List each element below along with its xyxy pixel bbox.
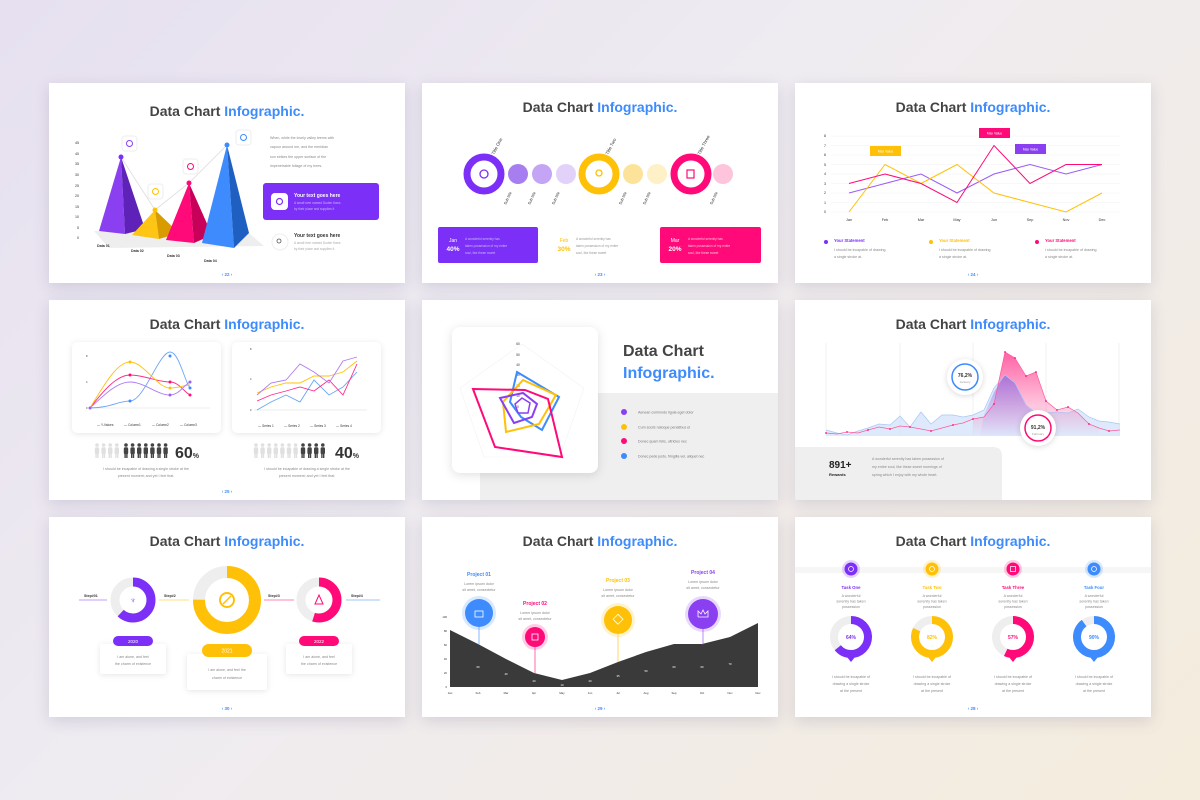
box: Feb: soul, like these sweet bbox=[576, 251, 606, 255]
area chart: Oct bbox=[700, 691, 704, 695]
card 2021: I am alone, and feel the bbox=[208, 668, 246, 672]
line chart: May bbox=[953, 218, 961, 222]
box: Mar: Mar bbox=[671, 238, 680, 244]
paragraph: vapour around me, and the meridian bbox=[270, 145, 328, 149]
project 01: sit amet, consectetur bbox=[462, 588, 496, 592]
rewards box: A wonderful serenity has taken possession of bbox=[872, 457, 944, 461]
rewards box: Rewards bbox=[829, 472, 846, 477]
project 02 bbox=[518, 601, 552, 674]
people 60%: 60% bbox=[175, 445, 200, 462]
task two: 82% bbox=[927, 635, 938, 641]
project 01: Lorem ipsum dolor bbox=[464, 582, 495, 586]
pyramid chart: Data 04 bbox=[204, 259, 217, 263]
circle row: Sub title bbox=[527, 191, 537, 205]
badge: 76,2%: January bbox=[960, 380, 971, 384]
radar card: 0 bbox=[517, 405, 519, 409]
area chart: Mar bbox=[504, 691, 508, 695]
callout: purple bbox=[263, 183, 379, 220]
slide 9: task donuts bbox=[795, 517, 1151, 717]
chart card left bbox=[72, 342, 221, 433]
box: Jan bbox=[438, 227, 538, 263]
title: Data Chart Infographic. bbox=[523, 99, 677, 115]
task two: Task Two bbox=[923, 585, 942, 590]
task two: at the present bbox=[921, 689, 943, 693]
area chart: 50 bbox=[644, 669, 648, 673]
legend bbox=[824, 238, 1097, 259]
paragraph: impenetrable foliage of my trees. bbox=[270, 164, 322, 168]
legend: I should be incapable of drawing bbox=[834, 248, 886, 252]
chart card right bbox=[232, 342, 381, 433]
box: Mar: soul, like these sweet bbox=[688, 251, 718, 255]
project 02: sit amet, consectetur bbox=[518, 617, 552, 621]
slide 8: dark area chart with projects: ‹ 29 › bbox=[595, 706, 606, 711]
circle row: Sub title bbox=[503, 191, 513, 205]
badge: 76,2% bbox=[947, 359, 983, 395]
pyramid chart: Data 01 bbox=[97, 244, 110, 248]
area chart: 60 bbox=[672, 665, 676, 669]
pyramid chart: Data 03 bbox=[167, 254, 180, 258]
title: Data Chart Infographic. bbox=[523, 533, 677, 549]
callout: second bbox=[272, 233, 341, 251]
box: Mar: A wonderful serenity has bbox=[688, 237, 723, 241]
chart card left: — Column1 bbox=[124, 423, 141, 427]
task three: serenity has taken bbox=[998, 600, 1028, 604]
area chart: Aug bbox=[644, 691, 649, 695]
project 04: sit amet, consectetur bbox=[686, 586, 720, 590]
box: Feb: A wonderful serenity has bbox=[576, 237, 611, 241]
slide 6: area chart with badges bbox=[795, 300, 1151, 500]
area chart: Jul bbox=[616, 691, 620, 695]
slide 7: step donuts bbox=[49, 517, 405, 717]
task four: drawing a single stroke bbox=[1076, 682, 1112, 686]
title: Data Chart Infographic. bbox=[150, 103, 304, 119]
task three: Task Three bbox=[1002, 585, 1025, 590]
chart card left: — Column3 bbox=[180, 423, 197, 427]
line chart: Max Value bbox=[1023, 148, 1038, 152]
slide 8: dark area chart with projects bbox=[422, 517, 778, 717]
circle row bbox=[467, 134, 733, 205]
circle row: Sub title bbox=[551, 191, 561, 205]
task three: A wonderful bbox=[1004, 594, 1023, 598]
task one: A wonderful bbox=[842, 594, 861, 598]
area chart: 70 bbox=[728, 662, 732, 666]
slide 3: line chart bbox=[795, 83, 1151, 283]
legend: I should be incapable of drawing bbox=[1045, 248, 1097, 252]
legend list: Cum sociis natoque penatibus et bbox=[638, 426, 690, 430]
line chart: 1 bbox=[824, 201, 826, 205]
area chart: Nov bbox=[728, 691, 733, 695]
project 03: sit amet, consectetur bbox=[601, 594, 635, 598]
box: Jan: soul, like these sweet bbox=[465, 251, 495, 255]
circle row: Sub title bbox=[709, 191, 719, 205]
task three: drawing a single stroke bbox=[995, 682, 1031, 686]
chart card right: — Series 4 bbox=[336, 424, 352, 428]
slide 4: two line charts with people: ‹ 25 › bbox=[222, 489, 233, 494]
project 04: Project 04 bbox=[691, 570, 715, 576]
title: Data Chart Infographic. bbox=[896, 533, 1050, 549]
task four: I should be incapable of bbox=[1075, 675, 1113, 679]
callout: purple: Your text goes here bbox=[294, 193, 341, 199]
paragraph: When, while the lovely valley teems with bbox=[270, 136, 334, 140]
line chart: 8 bbox=[824, 134, 826, 138]
rewards box bbox=[795, 447, 1002, 500]
area chart: Jan bbox=[448, 691, 453, 695]
radar card: 50 bbox=[516, 353, 520, 357]
project 04: Lorem ipsum dolor bbox=[688, 580, 719, 584]
callout: purple: A small river named Duden flows bbox=[294, 201, 341, 205]
chart card right: 4 bbox=[250, 377, 252, 381]
task four: at the present bbox=[1083, 689, 1105, 693]
donut 2021 bbox=[199, 572, 255, 628]
people 40% bbox=[254, 443, 360, 478]
box: Feb: Feb bbox=[560, 238, 569, 244]
area chart: 20 bbox=[532, 679, 536, 683]
task two bbox=[913, 560, 951, 693]
line chart: 3 bbox=[824, 182, 826, 186]
area chart: 10 bbox=[560, 683, 564, 687]
area chart: May bbox=[559, 691, 565, 695]
callout: purple: by their place and supplies it bbox=[294, 207, 334, 211]
callout: second: by their place and supplies it bbox=[294, 247, 334, 251]
chart card left: — Y-Values bbox=[97, 423, 114, 427]
pyramid chart: Data 02 bbox=[131, 249, 144, 253]
task one: at the present bbox=[840, 689, 862, 693]
step arrows: Step#2 bbox=[164, 594, 176, 598]
rewards box: spring which I enjoy with my whole heart. bbox=[872, 473, 937, 477]
paragraph: sun strikes the upper surface of the bbox=[270, 155, 326, 159]
pyramid chart: 10 bbox=[75, 215, 79, 219]
rewards box: my entire soul, like these sweet mornings of bbox=[872, 465, 942, 469]
step arrows: Step#3 bbox=[268, 594, 280, 598]
legend: a single stroke at. bbox=[1045, 255, 1073, 259]
area chart: Jun bbox=[588, 691, 593, 695]
line chart: Sep bbox=[1027, 218, 1033, 222]
rewards box: 891+ bbox=[829, 460, 852, 471]
legend: Your Statement bbox=[834, 238, 865, 243]
task one bbox=[832, 560, 870, 693]
people 40%: 40% bbox=[335, 445, 360, 462]
area chart: 60 bbox=[444, 643, 447, 647]
chart card left: — Column2 bbox=[152, 423, 169, 427]
title: Data Chart Infographic. bbox=[896, 99, 1050, 115]
chart card left: 0 bbox=[86, 406, 88, 410]
chart card right: 8 bbox=[250, 347, 252, 351]
slide 3: line chart: ‹ 24 › bbox=[968, 272, 979, 277]
task three bbox=[994, 560, 1032, 693]
legend: a single stroke at. bbox=[834, 255, 862, 259]
card 2020: 2020 bbox=[128, 639, 139, 644]
pyramid chart: 20 bbox=[75, 194, 79, 198]
circle row: Sub title bbox=[618, 191, 628, 205]
pyramid chart: 40 bbox=[75, 152, 79, 156]
callout: second: Your text goes here bbox=[294, 233, 341, 239]
slide 2: circle timeline: ‹ 23 › bbox=[595, 272, 606, 277]
area chart: 60 bbox=[700, 665, 704, 669]
legend: a single stroke at. bbox=[939, 255, 967, 259]
card 2022: the charm of existence bbox=[301, 662, 337, 666]
pyramid chart bbox=[75, 130, 264, 263]
area chart: 35 bbox=[616, 674, 620, 678]
legend list: Donec pede justo, fringilla vel, aliquet nec bbox=[638, 454, 705, 458]
area chart: Feb bbox=[476, 691, 481, 695]
line chart bbox=[824, 128, 1120, 222]
task four: 90% bbox=[1089, 635, 1100, 641]
line chart: 4 bbox=[824, 172, 826, 176]
chart card right: — Series 3 bbox=[310, 424, 326, 428]
area chart: Dec bbox=[756, 691, 761, 695]
title: Data Chart Infographic. bbox=[150, 316, 304, 332]
area chart: 100 bbox=[442, 615, 447, 619]
slide 7: step donuts: ‹ 30 › bbox=[222, 706, 233, 711]
legend: Your Statement bbox=[1045, 238, 1076, 243]
task four: possession bbox=[1085, 605, 1103, 609]
card 2021: 2021 bbox=[221, 648, 233, 654]
area chart: Apr bbox=[532, 691, 536, 695]
box: Jan: Jan bbox=[449, 238, 457, 244]
task two: possession bbox=[923, 605, 941, 609]
line chart: 0 bbox=[824, 210, 826, 214]
task one: I should be incapable of bbox=[832, 675, 870, 679]
slide 1: 3D pyramid chart: ‹ 22 › bbox=[222, 272, 233, 277]
area chart: 20 bbox=[444, 671, 447, 675]
card 2022: I am alone, and feel bbox=[303, 655, 335, 659]
task four bbox=[1075, 560, 1113, 693]
circle row: Title One bbox=[490, 137, 504, 155]
project 02: Project 02 bbox=[523, 601, 547, 607]
people 60%: present moment; and yet I feel that. bbox=[118, 474, 174, 478]
task four: A wonderful bbox=[1085, 594, 1104, 598]
people 60% bbox=[95, 443, 200, 478]
task two: serenity has taken bbox=[917, 600, 947, 604]
circle row: Title Three bbox=[696, 134, 711, 155]
pyramid chart: 5 bbox=[77, 226, 79, 230]
box: Jan: taken possession of my entire bbox=[465, 244, 507, 248]
chart card right: — Series 2 bbox=[284, 424, 300, 428]
donut 2020 bbox=[115, 582, 151, 618]
box: Mar: taken possession of my entire bbox=[688, 244, 730, 248]
legend list bbox=[621, 409, 705, 459]
project 02: Lorem ipsum dolor bbox=[520, 611, 551, 615]
task four: Task Four bbox=[1084, 585, 1104, 590]
badge: 91,2% bbox=[1020, 410, 1056, 446]
line chart: 2 bbox=[824, 191, 826, 195]
card 2021 bbox=[187, 644, 267, 690]
people 60%: I should be incapable of drawing a single stroke at the bbox=[103, 467, 189, 471]
project 01 bbox=[462, 572, 496, 645]
title: Infographic. bbox=[623, 365, 715, 382]
line chart: 7 bbox=[824, 144, 826, 148]
step arrows: Step#01 bbox=[84, 594, 98, 598]
area chart bbox=[442, 615, 761, 695]
project 03 bbox=[601, 578, 635, 662]
card 2021: charm of existence bbox=[212, 676, 242, 680]
chart card right: 0 bbox=[250, 408, 252, 412]
title: Data Chart Infographic. bbox=[896, 316, 1050, 332]
legend: Your Statement bbox=[939, 238, 970, 243]
slide 2: circle timeline bbox=[422, 83, 778, 283]
area chart: Sep bbox=[672, 691, 677, 695]
radar card: 40 bbox=[516, 363, 520, 367]
box: Mar: 20% bbox=[668, 246, 682, 253]
task four: serenity has taken bbox=[1079, 600, 1109, 604]
task two: I should be incapable of bbox=[913, 675, 951, 679]
title bbox=[623, 343, 715, 382]
radar card bbox=[452, 327, 598, 473]
legend list: Donec quam felis, ultricies nec bbox=[638, 440, 687, 444]
task two: A wonderful bbox=[923, 594, 942, 598]
task three: I should be incapable of bbox=[994, 675, 1032, 679]
card 2020: I am alone, and feel bbox=[117, 655, 149, 659]
title: Data Chart bbox=[623, 343, 705, 360]
line chart: Mar bbox=[918, 218, 925, 222]
paragraph bbox=[270, 136, 334, 168]
people 40%: I should be incapable of drawing a single stroke at the bbox=[264, 467, 350, 471]
task one: possession bbox=[842, 605, 860, 609]
task one: serenity has taken bbox=[836, 600, 866, 604]
badge: 76,2%: 76,2% bbox=[958, 373, 973, 379]
project 01: Project 01 bbox=[467, 572, 491, 578]
legend list: Aenean commodo ligula eget dolor bbox=[638, 410, 694, 414]
pyramid chart: 45 bbox=[75, 141, 79, 145]
pyramid chart: 25 bbox=[75, 184, 79, 188]
box: Jan: A wonderful serenity has bbox=[465, 237, 500, 241]
task three: at the present bbox=[1002, 689, 1024, 693]
line chart: Max Value bbox=[987, 132, 1002, 136]
slide 9: task donuts: ‹ 28 › bbox=[968, 706, 979, 711]
project 04 bbox=[685, 570, 721, 645]
task two: drawing a single stroke bbox=[914, 682, 950, 686]
badge: 91,2%: 91,2% bbox=[1031, 425, 1046, 431]
pyramid chart: 30 bbox=[75, 173, 79, 177]
radar card: 20 bbox=[516, 384, 520, 388]
badge: 91,2%: February bbox=[1032, 432, 1044, 436]
chart card left: 8 bbox=[86, 354, 88, 358]
card 2022 bbox=[286, 636, 352, 674]
area chart: 80 bbox=[444, 629, 447, 633]
radar card: 30 bbox=[516, 373, 520, 377]
area chart: 20 bbox=[588, 679, 592, 683]
area chart bbox=[825, 343, 1120, 436]
box: Feb bbox=[557, 237, 618, 255]
card 2020 bbox=[100, 636, 166, 674]
callout: second: A small river named Duden flows bbox=[294, 241, 341, 245]
area chart: 40 bbox=[444, 657, 447, 661]
pyramid chart: 35 bbox=[75, 162, 79, 166]
project 03: Project 03 bbox=[606, 578, 630, 584]
area chart: 60 bbox=[476, 665, 480, 669]
task one: drawing a single stroke bbox=[833, 682, 869, 686]
card 2020: the charm of existence bbox=[115, 662, 151, 666]
task one: Task One bbox=[841, 585, 861, 590]
line chart: Nov bbox=[1063, 218, 1069, 222]
slide 4: two line charts with people bbox=[49, 300, 405, 500]
radar card: 10 bbox=[516, 394, 520, 398]
pyramid chart: 0 bbox=[77, 236, 79, 240]
task one: 64% bbox=[846, 635, 857, 641]
radar card: 60 bbox=[516, 342, 520, 346]
people 40%: present moment; and yet I feel that. bbox=[279, 474, 335, 478]
circle row: Title Two bbox=[604, 137, 617, 155]
title: Data Chart Infographic. bbox=[150, 533, 304, 549]
slide 1: 3D pyramid chart bbox=[49, 83, 405, 283]
line chart: 5 bbox=[824, 163, 826, 167]
line chart: Jun bbox=[991, 218, 997, 222]
pyramid chart: 15 bbox=[75, 205, 79, 209]
card 2022: 2022 bbox=[314, 639, 325, 644]
box: Jan: 40% bbox=[446, 246, 460, 253]
circle row: Sub title bbox=[642, 191, 652, 205]
box: Mar bbox=[660, 227, 761, 263]
task three: possession bbox=[1004, 605, 1022, 609]
donut 2022 bbox=[301, 582, 337, 618]
line chart: 6 bbox=[824, 153, 826, 157]
box: Feb: taken possession of my entire bbox=[576, 244, 618, 248]
donut 2020: ♆ bbox=[130, 596, 136, 605]
chart card right: — Series 1 bbox=[258, 424, 274, 428]
box: Feb: 30% bbox=[557, 246, 571, 253]
legend: I should be incapable of drawing bbox=[939, 248, 991, 252]
step arrows: Step#4 bbox=[351, 594, 363, 598]
project 03: Lorem ipsum dolor bbox=[603, 588, 634, 592]
line chart: Jan bbox=[846, 218, 852, 222]
area chart: 40 bbox=[504, 672, 508, 676]
chart card left: 4 bbox=[86, 380, 88, 384]
line chart: Max Value bbox=[878, 150, 893, 154]
step arrows bbox=[79, 594, 380, 600]
slide 5: radar chart bbox=[422, 300, 778, 500]
line chart: Feb bbox=[882, 218, 888, 222]
area chart: 0 bbox=[445, 685, 447, 689]
task three: 57% bbox=[1008, 635, 1019, 641]
line chart: Dec bbox=[1099, 218, 1105, 222]
